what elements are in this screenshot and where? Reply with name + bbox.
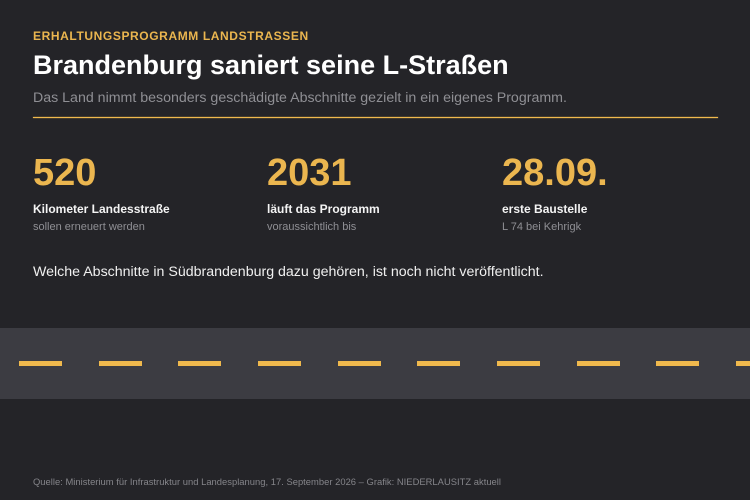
stat: 28.09. [502,152,608,233]
source line: Quelle: Ministerium für Infrastruktur und Landesplanung, 17. September 2026 – Grafik: NIEDERLAUSITZ aktuell [33,476,501,487]
eyebrow heading: ERHALTUNGSPROGRAMM LANDSTRASSEN [33,28,309,42]
stat label: läuft das Programm [267,202,380,216]
stat number: 520 [33,152,96,194]
stat label: erste Baustelle [502,202,587,216]
stat number: 28.09. [502,152,608,194]
stat note: sollen erneuert werden [33,221,145,233]
stat number: 2031 [267,152,352,194]
road graphic [0,328,750,399]
stat: 2031 [267,152,380,233]
note text: Welche Abschnitte in Südbrandenburg dazu gehören, ist noch nicht veröffentlicht. [33,264,544,280]
subtitle: Das Land nimmt besonders geschädigte Abschnitte gezielt in ein eigenes Programm. [33,90,567,106]
title: Brandenburg saniert seine L-Straßen [33,50,509,80]
stat note: voraussichtlich bis [267,221,356,233]
stat label: Kilometer Landesstraße [33,202,170,216]
stat: 520 kilometres [33,152,170,233]
header rule [33,117,718,118]
stat note: L 74 bei Kehrigk [502,221,581,233]
